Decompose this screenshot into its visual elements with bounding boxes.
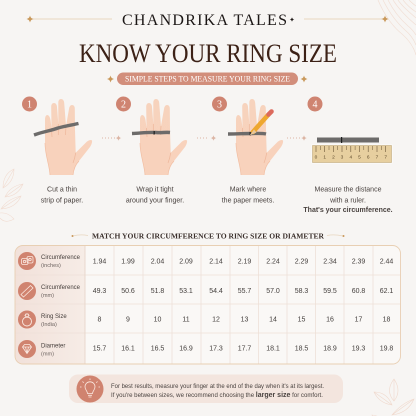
- table heading: MATCH YOUR CIRCUMFERENCE TO RING SIZE OR DIAMETER: [92, 232, 324, 240]
- row: diameter: 16.5: [151, 346, 164, 352]
- row: circumference inches: 2.19: [238, 258, 251, 266]
- arrow 3: [287, 135, 307, 141]
- row: circumference mm: 54.4: [209, 288, 223, 295]
- step 2 caption: Wrap it tight: [136, 186, 174, 194]
- ruler: 2: [332, 154, 335, 160]
- row: circumference inches: (inches): [41, 263, 61, 269]
- step 4 caption: That's your circumference.: [303, 207, 393, 214]
- ruler: 0: [315, 154, 318, 160]
- step 1 caption: Cut a thin: [47, 186, 77, 194]
- subtitle pill: SIMPLE STEPS TO MEASURE YOUR RING SIZE: [125, 75, 290, 84]
- step 2: [116, 96, 187, 204]
- step 1: [22, 96, 92, 204]
- brand header: CHANDRIKA TALES: [122, 12, 287, 29]
- row: ring size: 17: [355, 316, 362, 324]
- row: circumference mm: (mm): [41, 293, 54, 299]
- step 4 caption: Measure the distance: [315, 186, 382, 194]
- tip callout: [69, 374, 343, 403]
- title: KNOW YOUR RING SIZE: [79, 38, 337, 68]
- row: circumference mm: 49.3: [93, 288, 106, 295]
- row: circumference inches: 2.29: [295, 258, 308, 266]
- icon: paper roll: [18, 252, 36, 270]
- icon: ring: [18, 310, 36, 328]
- row: circumference inches: 2.14: [209, 258, 223, 266]
- row: circumference mm: 60.8: [352, 288, 365, 295]
- row: ring size: 10: [154, 316, 161, 324]
- step 4 caption: [303, 186, 393, 214]
- row: circumference mm: 51.8: [151, 288, 164, 295]
- step 3: [212, 96, 283, 204]
- ruler: [312, 145, 392, 163]
- step 1 hand with paper strip: [34, 99, 92, 175]
- row: circumference mm: [18, 282, 393, 300]
- row: ring size: 9: [126, 316, 130, 324]
- ruler: 7: [384, 154, 387, 160]
- ruler: 6: [367, 154, 370, 160]
- row: circumference mm: 62.1: [380, 288, 393, 295]
- icon: light bulb: [76, 376, 104, 402]
- row: diameter: 16.1: [121, 346, 135, 352]
- row: circumference mm: 57.0: [266, 288, 280, 295]
- ruler: 7: [376, 154, 379, 160]
- step 1 caption: strip of paper.: [41, 198, 83, 204]
- row: diameter: 18.1: [266, 346, 280, 352]
- row: circumference inches: 2.39: [352, 258, 365, 266]
- tip text: If you're between sizes, we recommend choosing the larger size for comfort.: [111, 392, 323, 399]
- icon: diamond: [18, 340, 36, 358]
- row: diameter: 16.9: [179, 346, 193, 352]
- decorative leaves bottom right: [372, 379, 414, 416]
- row: diameter: 19.3: [352, 346, 365, 352]
- step 3 caption: [222, 186, 274, 204]
- row: diameter: 17.7: [238, 346, 251, 352]
- step 4: [303, 96, 393, 214]
- row: ring size: 14: [269, 316, 277, 324]
- row: diameter: 19.8: [380, 346, 393, 352]
- row: circumference inches: 2.34: [323, 258, 337, 266]
- row: diameter: Diameter: [41, 344, 65, 350]
- row: diameter: 15.7: [93, 346, 106, 352]
- icon: ruler: [18, 282, 36, 300]
- ruler: 1: [323, 154, 326, 160]
- brand header: [26, 12, 388, 29]
- row: circumference inches: 1.94: [93, 258, 106, 266]
- ruler: 5: [358, 154, 361, 160]
- step 2 hand with wrapped strip: [132, 99, 187, 175]
- row: circumference mm: 53.1: [179, 288, 193, 295]
- size table: [15, 246, 400, 364]
- row: circumference inches: 2.24: [266, 258, 280, 266]
- row: diameter: 18.5: [295, 346, 308, 352]
- arrow 1: [102, 135, 121, 141]
- step 3 caption: Mark where: [230, 186, 266, 194]
- decorative waves top right: [378, 0, 416, 55]
- row: ring size: 13: [241, 316, 248, 324]
- row: ring size: Ring Size: [41, 314, 67, 320]
- row: ring size: 15: [298, 316, 305, 324]
- row: circumference inches: Circumference: [41, 255, 81, 261]
- row: ring size: [18, 310, 390, 328]
- step 3 caption: the paper meets.: [222, 198, 274, 204]
- row: circumference mm: 59.5: [323, 288, 337, 295]
- row: circumference inches: 2.09: [179, 258, 193, 266]
- row: ring size: 18: [383, 316, 390, 324]
- row: diameter: [18, 340, 393, 358]
- step 2 caption: around your finger.: [126, 198, 184, 204]
- row: ring size: 16: [326, 316, 334, 324]
- row: diameter: (mm): [41, 352, 54, 358]
- step 2 number: 2: [121, 100, 126, 110]
- step 4 number: 4: [312, 100, 318, 110]
- tip text: [111, 383, 324, 399]
- row: circumference mm: 58.3: [295, 288, 308, 295]
- row: circumference inches: 2.44: [380, 258, 393, 266]
- row: circumference mm: 50.6: [121, 288, 135, 295]
- tip text: For best results, measure your finger at the end of the day when it's at its largest.: [111, 383, 324, 390]
- row: circumference inches: 2.04: [151, 258, 164, 266]
- decorative leaves left: [0, 169, 23, 221]
- ruler: 4: [349, 154, 352, 160]
- row: ring size: 11: [182, 316, 190, 324]
- step 4 caption: with a ruler.: [329, 198, 366, 204]
- step 2 caption: [126, 186, 184, 204]
- row: circumference inches: 1.99: [121, 258, 135, 266]
- step 1 number: 1: [27, 100, 32, 110]
- row: diameter: 17.3: [209, 346, 223, 352]
- row: diameter: 18.9: [323, 346, 337, 352]
- row: circumference mm: 55.7: [238, 288, 251, 295]
- step 3 hand with strip and pencil: [228, 99, 283, 175]
- ruler: 3: [341, 154, 344, 160]
- subtitle pill: [107, 72, 308, 85]
- row: ring size: (India): [41, 322, 57, 328]
- row: ring size: 12: [212, 316, 220, 324]
- row: circumference mm: Circumference: [41, 285, 81, 291]
- row: circumference inches: [18, 252, 393, 270]
- step 3 number: 3: [217, 100, 222, 110]
- paper strip: [317, 137, 379, 143]
- arrow 2: [197, 135, 216, 141]
- row: ring size: 8: [98, 316, 102, 324]
- step 1 caption: [41, 186, 83, 204]
